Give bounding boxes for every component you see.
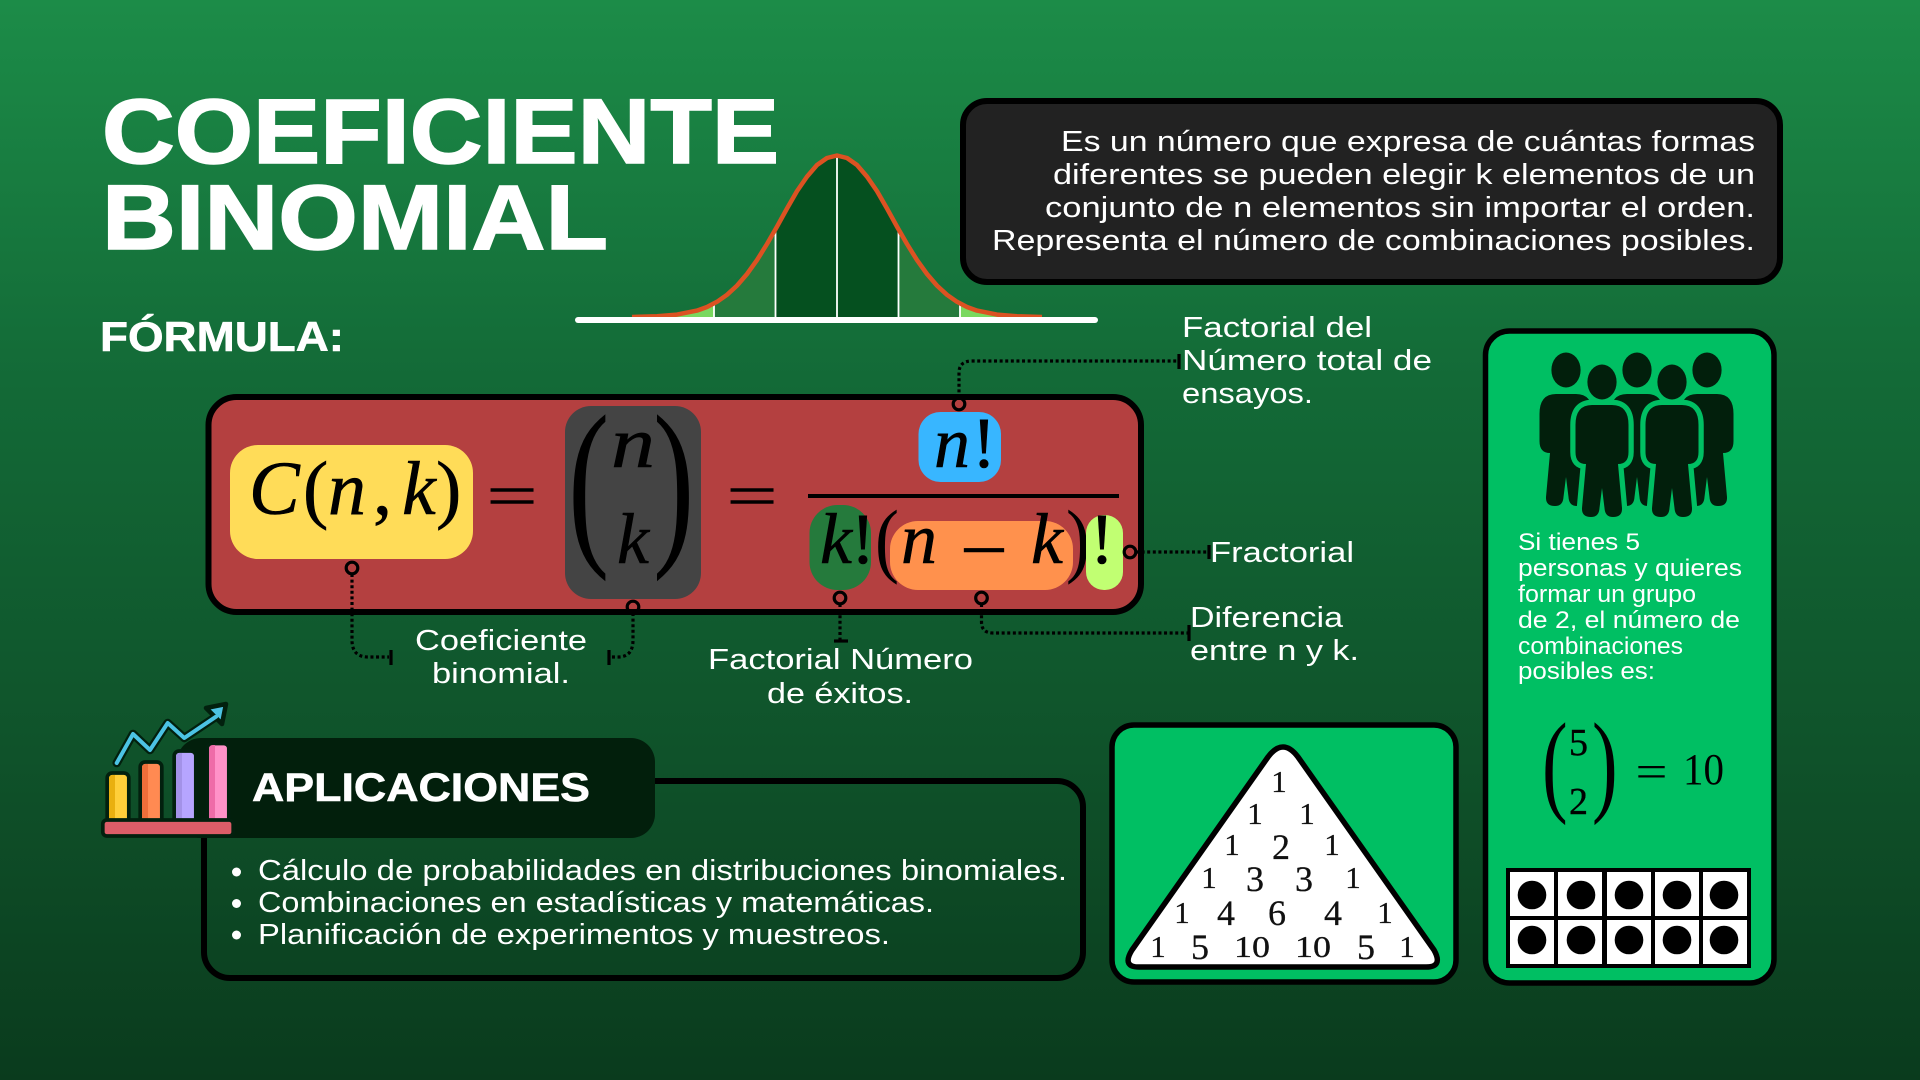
list of applications: Planificación de experimentos y muestreos.: [258, 919, 890, 951]
highlight: n minus k: k: [1031, 499, 1065, 579]
math: 5 choose 2 equals 10: =: [1636, 746, 1668, 797]
icon: bar chart with rising arrow: [103, 704, 233, 836]
ten-frame grid of dots: [1506, 868, 1751, 968]
parentheses around n minus k: [875, 493, 1090, 585]
highlight: binomial n over k: k: [617, 499, 651, 579]
math: 5 choose 2 equals 10: (: [1542, 700, 1568, 826]
connector: k factorial: [834, 592, 848, 641]
label: factorial total: Factorial del: [1182, 312, 1372, 344]
pascal numbers: 1: [1271, 764, 1287, 799]
heading: aplicaciones: [177, 738, 655, 838]
pascal numbers: 1: [1224, 827, 1240, 862]
highlight: n!: n: [934, 403, 970, 483]
description panel: [963, 101, 1780, 282]
example text: Si tienes 5: [1518, 529, 1640, 556]
example text: [1518, 529, 1742, 685]
label: factorial número de éxitos: Factorial Número: [708, 644, 973, 676]
highlight: final factorial: [1086, 499, 1123, 590]
highlight: binomial n over k: (: [568, 378, 609, 582]
math: 5 choose 2 equals 10: ): [1592, 700, 1618, 826]
parentheses around n minus k: ): [1066, 493, 1090, 585]
label: factorial número de éxitos: [708, 644, 973, 710]
description panel: conjunto de n elementos sin importar el orden.: [1045, 192, 1755, 224]
connector: final factorial: [1124, 545, 1209, 559]
example text: combinaciones: [1518, 633, 1683, 660]
pascal numbers: 1: [1201, 860, 1217, 895]
highlight: C(n,k): ): [436, 447, 461, 531]
pascal numbers: 1: [1174, 895, 1190, 930]
example text: de 2, el número de: [1518, 607, 1740, 634]
icon: group of people: [1540, 352, 1734, 517]
pascal numbers: 6: [1268, 893, 1286, 933]
panel: formula: [208, 378, 1141, 612]
fraction bar: [808, 494, 1119, 498]
label: fractorial: Fractorial: [1210, 537, 1354, 569]
panel: pascal triangle: [1112, 725, 1456, 982]
math: 5 choose 2 equals 10: 2: [1569, 781, 1588, 823]
example text: formar un grupo: [1518, 581, 1696, 608]
panel: aplicaciones: [177, 738, 1083, 978]
highlight: binomial n over k: n: [611, 403, 655, 483]
connector: n minus k: [976, 592, 1189, 641]
highlight: n minus k: −: [960, 510, 1008, 590]
pascal numbers: [1150, 764, 1415, 967]
highlight: final factorial: !: [1090, 499, 1114, 579]
description panel: Representa el número de combinaciones posibles.: [992, 225, 1755, 257]
panel: example: [1486, 331, 1774, 983]
title: COEFICIENTE: [102, 81, 779, 183]
pascal numbers: 1: [1324, 827, 1340, 862]
highlight: n minus k: [890, 499, 1073, 590]
pascal numbers: 5: [1191, 927, 1209, 967]
connector: coeficiente left: [346, 562, 391, 665]
label: coeficiente binomial: binomial.: [432, 658, 570, 690]
list of applications: Combinaciones en estadísticas y matemáticas.: [258, 887, 934, 919]
highlight: n!: !: [972, 403, 996, 483]
title: BINOMIAL: [102, 167, 608, 269]
pascal numbers: 1: [1247, 796, 1263, 831]
highlight: n minus k: n: [901, 499, 937, 579]
equals sign two: =: [726, 463, 778, 529]
parentheses around n minus k: (: [875, 493, 899, 585]
example text: personas y quieres: [1518, 555, 1742, 582]
highlight: k!: !: [851, 499, 875, 579]
pascal numbers: 3: [1295, 859, 1313, 899]
pascal numbers: 1: [1345, 860, 1361, 895]
label: diferencia: Diferencia: [1190, 602, 1344, 634]
bell curve chart: [575, 156, 1098, 323]
math: 5 choose 2 equals 10: 10: [1683, 745, 1724, 794]
highlight: C(n,k): ,: [373, 447, 392, 531]
triangle shape: [1128, 747, 1437, 967]
highlight: binomial n over k: [565, 378, 701, 599]
list of applications: Cálculo de probabilidades en distribuciones binomiales.: [258, 855, 1067, 887]
highlight: k!: k: [820, 499, 854, 579]
equals sign one: =: [486, 463, 538, 529]
label: factorial total: [1182, 312, 1432, 410]
label: factorial número de éxitos: de éxitos.: [767, 678, 913, 710]
pascal numbers: 1: [1399, 929, 1415, 964]
highlight: C(n,k): (: [303, 447, 328, 531]
highlight: C(n,k): C: [249, 447, 301, 531]
highlight: C(n,k): [230, 445, 473, 559]
connector: n factorial: [953, 354, 1179, 410]
heading: fórmula: FÓRMULA:: [100, 312, 344, 360]
description panel: Es un número que expresa de cuántas formas: [1061, 126, 1755, 158]
title: [102, 81, 779, 269]
pascal numbers: 5: [1357, 927, 1375, 967]
math: 5 choose 2 equals 10: 5: [1569, 722, 1588, 764]
pascal numbers: 1: [1377, 895, 1393, 930]
example text: posibles es:: [1518, 658, 1655, 685]
highlight: C(n,k): k: [402, 447, 437, 531]
pascal numbers: 1: [1299, 796, 1315, 831]
connector: coeficiente right: [609, 601, 639, 665]
pascal numbers: 1: [1150, 929, 1166, 964]
highlight: binomial n over k: ): [653, 378, 694, 582]
label: factorial total: Número total de: [1182, 345, 1432, 377]
highlight: k!: [810, 499, 875, 590]
pascal numbers: 2: [1272, 827, 1290, 867]
label: diferencia: [1190, 602, 1359, 667]
pascal numbers: 10: [1234, 929, 1270, 964]
pascal numbers: 3: [1246, 859, 1264, 899]
list of applications: [232, 855, 1067, 951]
highlight: n!: [918, 403, 1001, 483]
label: diferencia: entre n y k.: [1190, 635, 1359, 667]
pascal numbers: 4: [1324, 893, 1342, 933]
pascal numbers: 4: [1217, 893, 1235, 933]
label: coeficiente binomial: Coeficiente: [415, 625, 587, 657]
description panel: diferentes se pueden elegir k elementos de un: [1053, 159, 1755, 191]
highlight: C(n,k): n: [328, 447, 366, 531]
label: coeficiente binomial: [415, 625, 587, 690]
heading: aplicaciones: APLICACIONES: [252, 766, 590, 810]
label: factorial total: ensayos.: [1182, 378, 1313, 410]
pascal numbers: 10: [1295, 929, 1331, 964]
math: 5 choose 2 equals 10: [1542, 700, 1724, 826]
